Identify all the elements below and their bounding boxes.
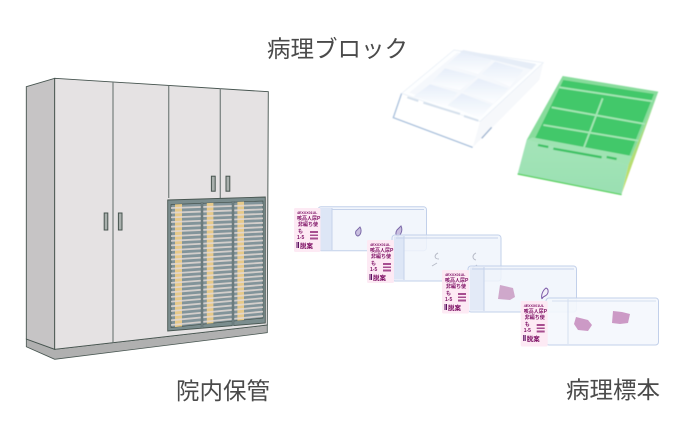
tissue outline [542, 288, 548, 299]
slide label: 非編ち使 [298, 221, 318, 228]
tissue sample [498, 285, 515, 300]
slide label [367, 240, 394, 283]
cabinet plinth [26, 325, 267, 359]
white cassette tray [393, 50, 543, 147]
slide label: 咳高人尿P [297, 215, 321, 222]
slide label [521, 301, 548, 346]
slide label: も [371, 260, 376, 267]
slide label: 1-5 [524, 328, 531, 334]
specimen drawers [171, 200, 263, 330]
slide glass [392, 235, 501, 281]
white tray right side [473, 63, 543, 147]
slide label: 咳高人尿P [524, 308, 548, 315]
green tray ribs [543, 87, 653, 147]
slide label: 非編ち使 [446, 283, 466, 290]
tissue marks [356, 226, 402, 236]
white tray top rim [402, 50, 543, 122]
door handles [104, 176, 230, 230]
green cassette tray [518, 76, 658, 195]
green tray right side [622, 92, 658, 194]
heading: 病理標本: 病理標本 [566, 377, 660, 403]
heading: 病理ブロック: 病理ブロック [267, 36, 408, 62]
slide label: 咳高人尿P [445, 277, 469, 284]
slide label: 1-5 [297, 235, 304, 241]
slide label: 脱案 [448, 303, 462, 312]
slide 1 [294, 207, 426, 252]
white tray tray bed [409, 53, 537, 117]
slide glass [318, 207, 426, 251]
white tray front face [393, 93, 480, 147]
column dividers [202, 201, 233, 328]
slide label: 脱案 [527, 334, 540, 343]
cabinet front [55, 78, 268, 349]
slide label: 4EXXX01UL [524, 304, 545, 308]
tissue samples [574, 311, 630, 331]
white tray back slot [460, 50, 536, 69]
slide glass [468, 266, 576, 312]
pathology slides [294, 207, 658, 346]
slide label: 1-5 [370, 267, 377, 273]
tissue marks [432, 253, 477, 268]
slide 2 [367, 235, 501, 283]
green tray front face [518, 140, 628, 194]
slide label: 4EXXX01UL [297, 211, 318, 215]
slide label: 非編ち使 [525, 314, 545, 321]
slide 3 [442, 266, 576, 314]
slide label: 非編ち使 [371, 253, 391, 260]
slide label [294, 208, 321, 252]
door seams [113, 82, 220, 343]
cabinet side panel [26, 78, 55, 349]
slide label [442, 270, 469, 314]
green tray front lip [527, 137, 632, 165]
slide label: も [298, 228, 303, 235]
white tray wells [413, 52, 523, 118]
slide label: 1-5 [445, 297, 452, 303]
slide label: 4EXXX01UL [370, 243, 391, 247]
storage cabinet [26, 78, 268, 359]
green tray top surface [527, 76, 658, 165]
slide label: 脱案 [300, 241, 314, 250]
heading: 院内保管: 院内保管 [176, 378, 270, 404]
green tray front slots [538, 145, 617, 159]
slide glass [546, 298, 658, 345]
slide 4 [521, 298, 658, 346]
slide storage window [168, 197, 265, 331]
slide label: 脱案 [373, 273, 386, 282]
green tray recess [535, 80, 654, 156]
slide label: 4EXXX01UL [445, 273, 466, 277]
slide label: も [525, 321, 530, 328]
slide label: も [446, 290, 451, 297]
slide label: 咳高人尿P [370, 247, 394, 254]
